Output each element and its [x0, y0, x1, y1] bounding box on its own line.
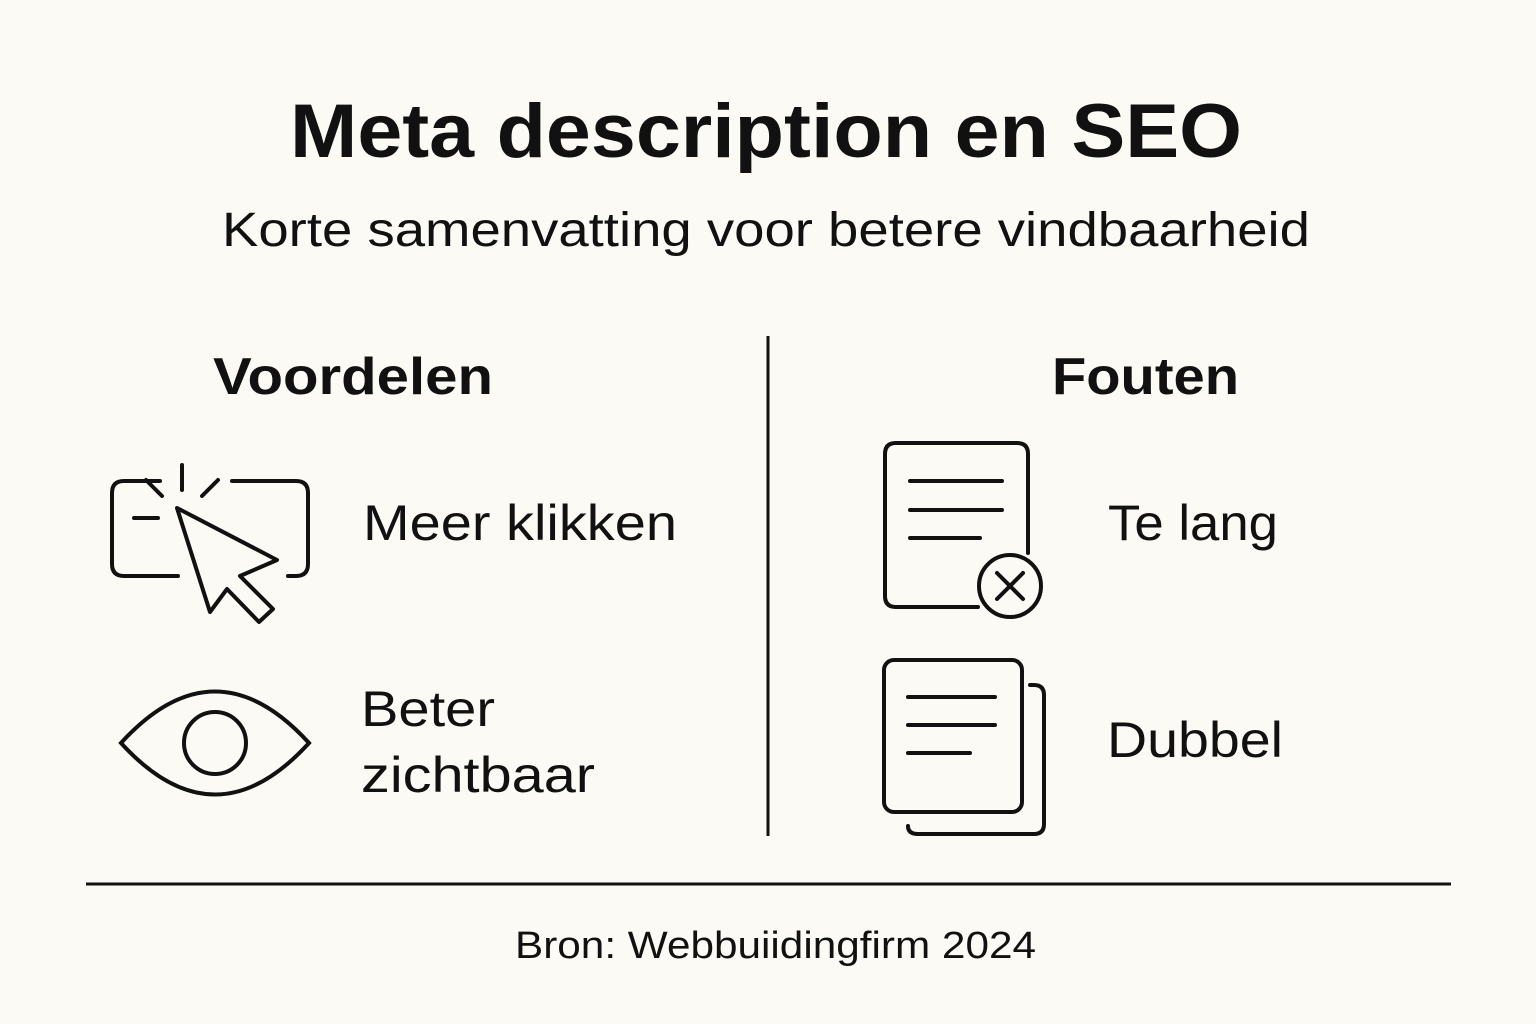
text: Beter zichtbaar: [361, 681, 595, 803]
subtitle: Korte samenvatting voor betere vindbaarheid: [222, 204, 1310, 257]
heading: Fouten: Fouten: [1052, 348, 1239, 406]
text: Beter zichtbaar: zichtbaar: [361, 747, 595, 803]
heading: Voordelen: Voordelen: [213, 348, 493, 406]
icon: duplicate documents: [884, 660, 1044, 834]
text: Meer klikken: Meer klikken: [363, 495, 677, 551]
vertical divider: [766, 336, 770, 836]
text: Beter zichtbaar: Beter: [361, 681, 495, 737]
icon: click cursor: [112, 465, 308, 622]
title: Meta description en SEO: [290, 89, 1242, 174]
icon: eye: [121, 692, 309, 794]
text: Dubbel: Dubbel: [1107, 712, 1283, 768]
icon: document with x: [885, 443, 1041, 617]
footer source: Bron: Webbuiidingfirm 2024: [515, 925, 1036, 967]
text: Te lang: Te lang: [1108, 495, 1278, 551]
